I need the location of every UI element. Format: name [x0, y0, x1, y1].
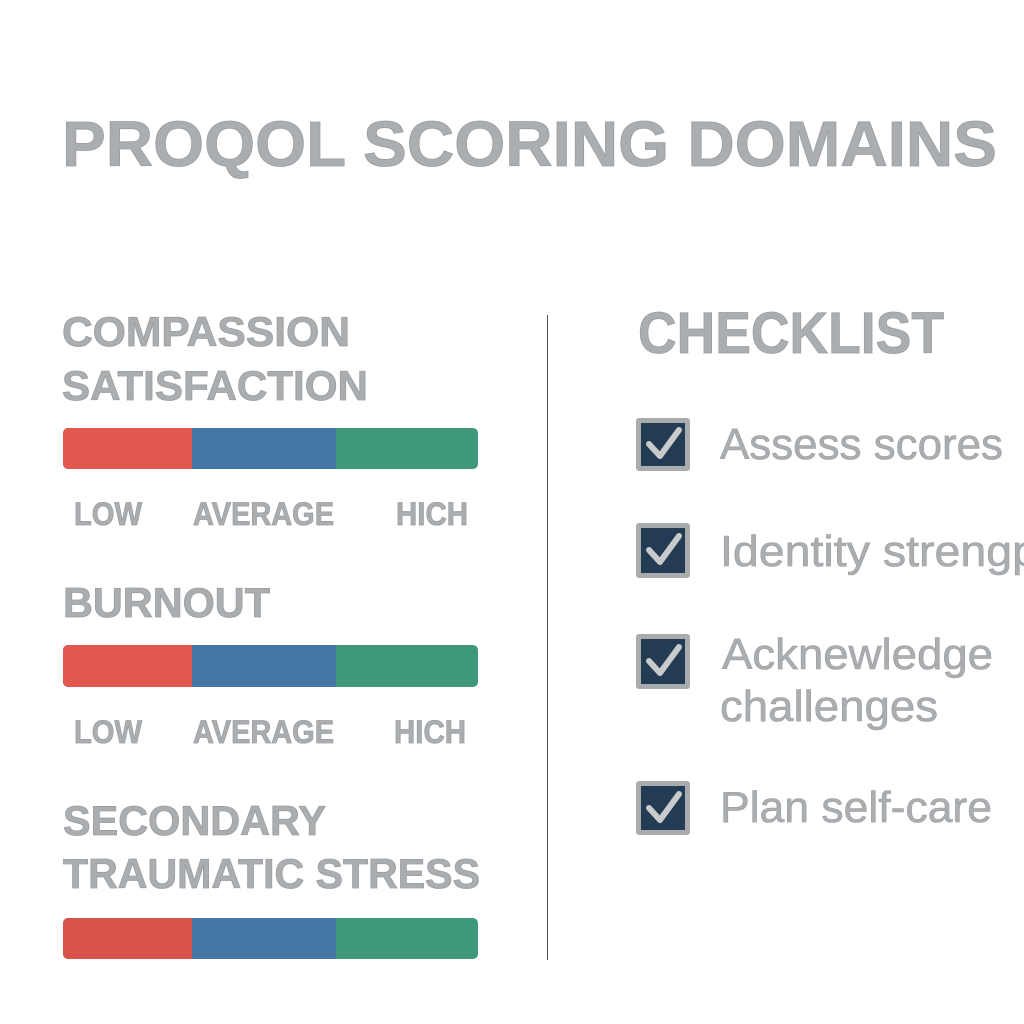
bar: secondary traumatic stress: [63, 918, 478, 959]
labels: low average high: HICH: [394, 714, 466, 750]
heading: compassion satisfaction: SATISFACTION: [62, 362, 368, 409]
item: plan self-care: Plan self-care: [720, 783, 992, 832]
bar: compassion satisfaction: [63, 428, 478, 469]
heading: compassion satisfaction: [62, 308, 368, 409]
bar: burnout: [63, 645, 478, 687]
heading: secondary traumatic stress: SECONDARY: [63, 797, 326, 844]
heading: burnout: BURNOUT: [63, 579, 270, 626]
item: assess scores: Assess scores: [720, 420, 1003, 469]
item: identity strengths: Identity strengp: [720, 527, 1024, 576]
title: PROQOL SCORING DOMAINS: [62, 108, 997, 180]
heading: checklist: CHECKLIST: [638, 301, 944, 366]
labels: low average high: LOW: [74, 496, 143, 532]
panel: checklist: [636, 301, 1024, 835]
heading: secondary traumatic stress: [63, 797, 480, 897]
heading: secondary traumatic stress: TRAUMATIC STRESS: [63, 850, 480, 897]
labels: low average high: [74, 496, 468, 532]
labels: low average high: HICH: [396, 496, 468, 532]
item: acknowledge challenges: challenges: [720, 682, 938, 731]
labels: low average high: AVERAGE: [193, 714, 334, 750]
labels: low average high: LOW: [74, 714, 143, 750]
labels: low average high: [74, 714, 466, 750]
item: acknowledge challenges: [636, 630, 993, 731]
labels: low average high: AVERAGE: [193, 496, 334, 532]
heading: compassion satisfaction: COMPASSION: [62, 308, 350, 355]
item: acknowledge challenges: Acknewledge: [722, 630, 993, 679]
panel: scoring domains: [62, 308, 480, 959]
item: plan self-care: [636, 781, 992, 835]
item: identity strengths: [636, 523, 1024, 578]
